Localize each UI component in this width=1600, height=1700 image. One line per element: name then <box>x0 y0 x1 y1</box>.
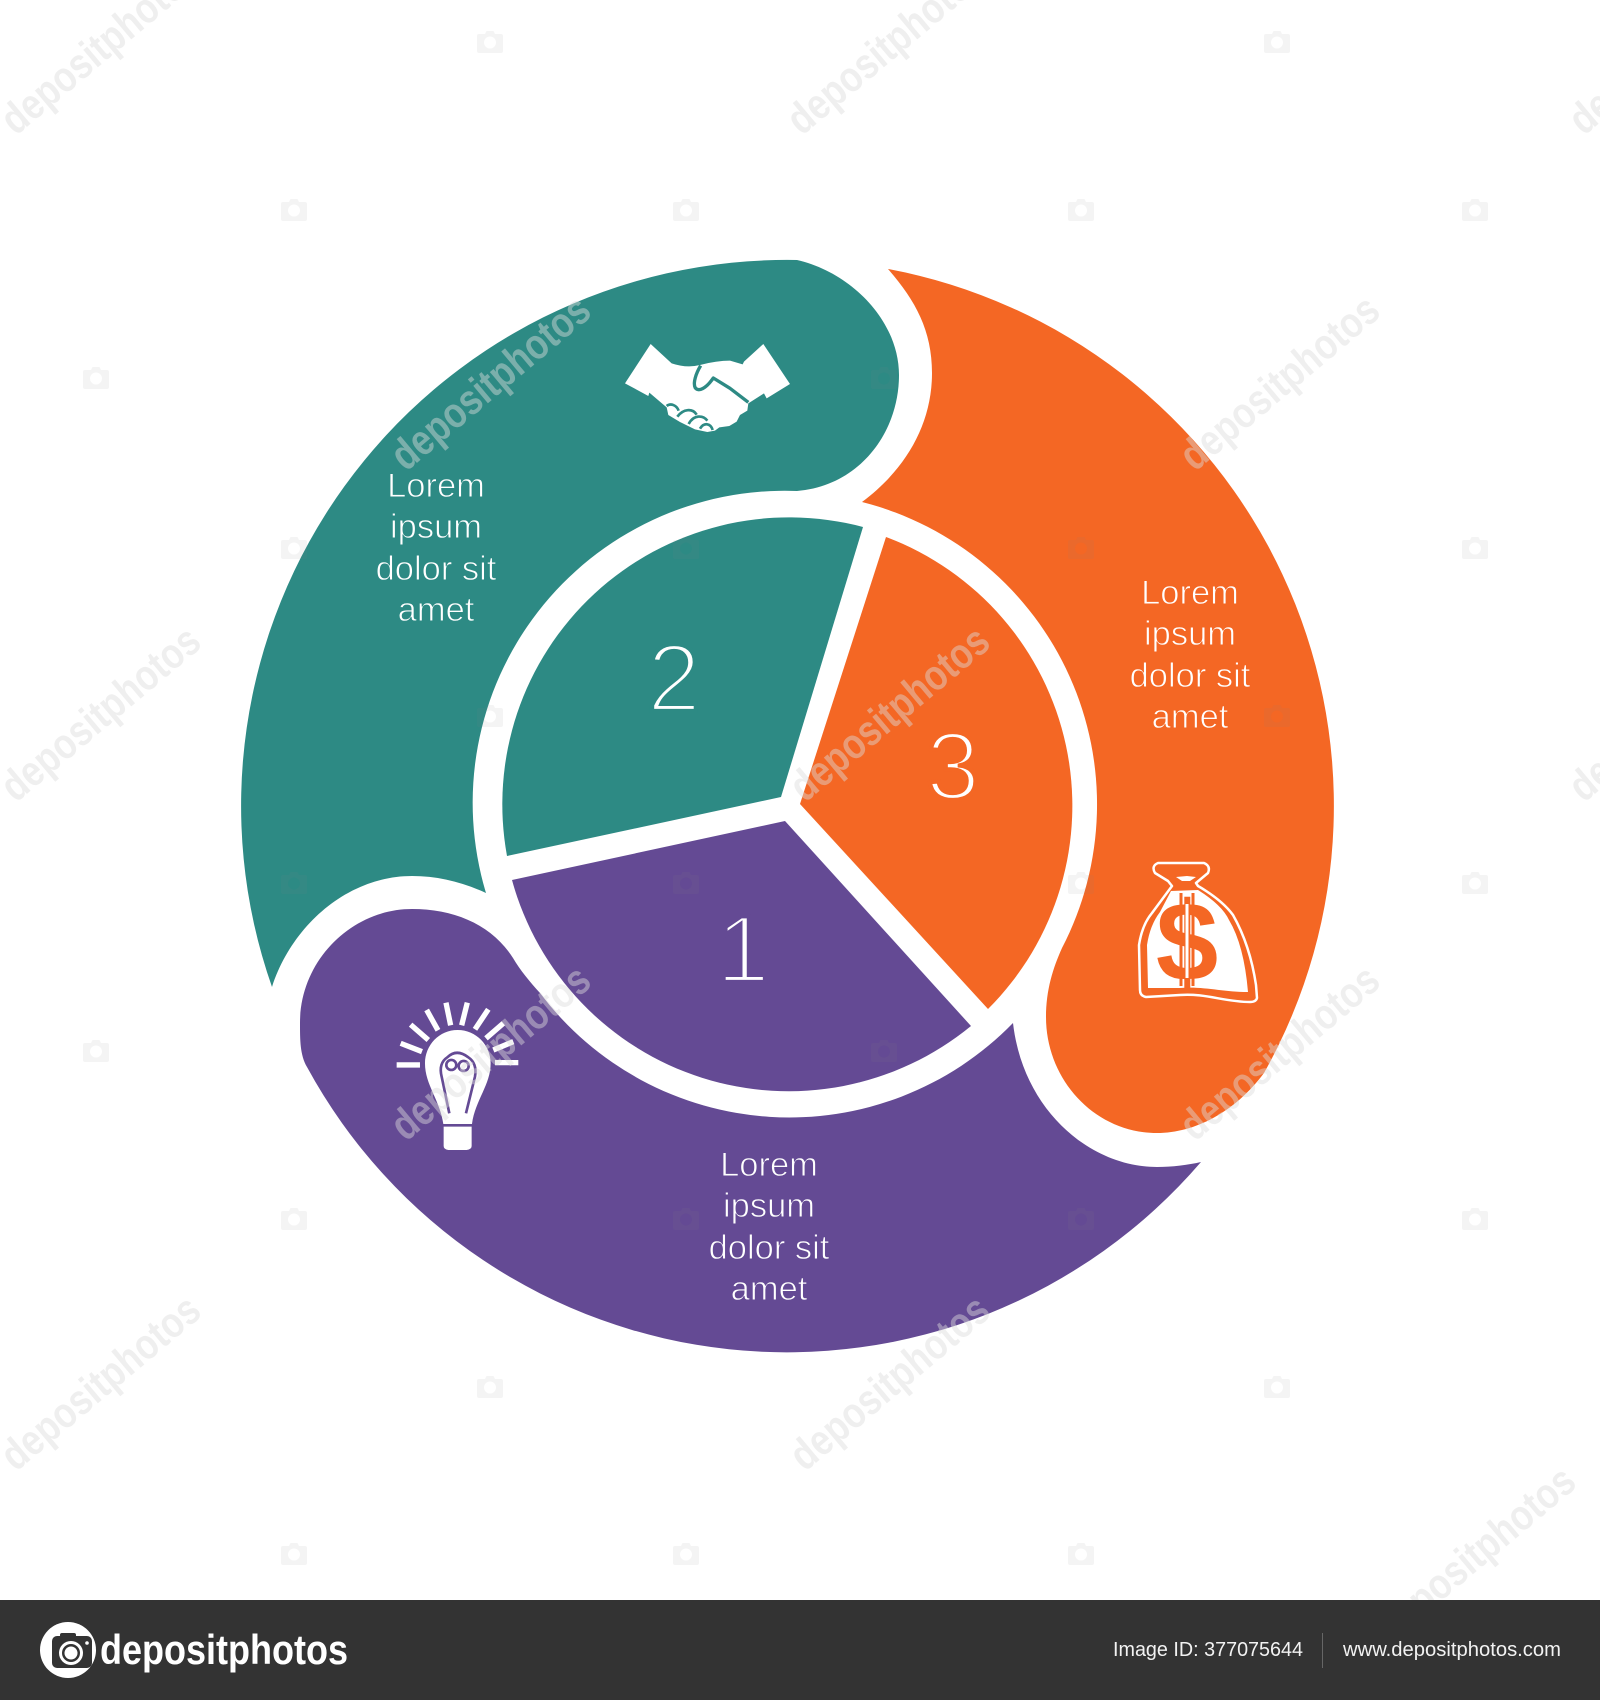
watermark: repeated wordmarks: depositphotos <box>381 286 600 480</box>
text block: orange segment: amet <box>1152 698 1229 736</box>
outer segment 2: teal <box>241 260 899 987</box>
text block: purple segment: amet <box>731 1270 808 1308</box>
image id: Image ID: 377075644 <box>1113 1639 1303 1661</box>
text block: teal segment: ipsum <box>390 508 482 546</box>
watermark: repeated wordmarks: depositphotos <box>780 1286 999 1480</box>
text block: purple segment: dolor sit <box>709 1229 830 1267</box>
icon: handshake <box>625 344 790 432</box>
text block: teal segment <box>376 467 497 629</box>
text block: teal segment: dolor sit <box>376 550 497 588</box>
text block: purple segment: Lorem <box>720 1146 818 1184</box>
icon: money bag <box>1139 863 1257 1004</box>
inner sector 1: purple <box>512 821 971 1091</box>
number 3: 3 <box>926 713 980 820</box>
number 2: 2 <box>647 625 701 732</box>
text block: orange segment: ipsum <box>1144 615 1236 653</box>
icon: money bag: $ <box>1156 879 1218 1004</box>
text block: teal segment: Lorem <box>387 467 485 505</box>
logo: camera badge <box>40 1622 96 1678</box>
text block: purple segment <box>709 1146 830 1308</box>
outer segment 3: orange <box>862 269 1334 1133</box>
logo: wordmark: depositphotos <box>100 1626 348 1673</box>
inner sector 2: teal <box>502 517 863 856</box>
text block: orange segment: dolor sit <box>1130 657 1251 695</box>
text block: teal segment: amet <box>398 591 475 629</box>
outer segment 1: purple <box>300 909 1201 1352</box>
watermark: repeated wordmarks: depositphotos <box>381 956 600 1150</box>
watermark: repeated wordmarks: depositphotos <box>1170 286 1389 480</box>
text block: purple segment: ipsum <box>723 1187 815 1225</box>
number 1: 1 <box>716 896 770 1003</box>
icon: light bulb <box>397 1003 518 1150</box>
watermark: small camera marks <box>83 31 1488 1565</box>
watermark: repeated wordmarks: depositphotos <box>1170 956 1389 1150</box>
text block: orange segment: Lorem <box>1141 574 1239 612</box>
inner sector 3: orange <box>800 537 1072 1009</box>
footer bar <box>0 1600 1600 1700</box>
footer divider <box>1322 1633 1323 1668</box>
website: www.depositphotos.com <box>1342 1639 1561 1661</box>
watermark: repeated wordmarks: depositphotos <box>780 617 999 811</box>
text block: orange segment <box>1130 574 1251 736</box>
